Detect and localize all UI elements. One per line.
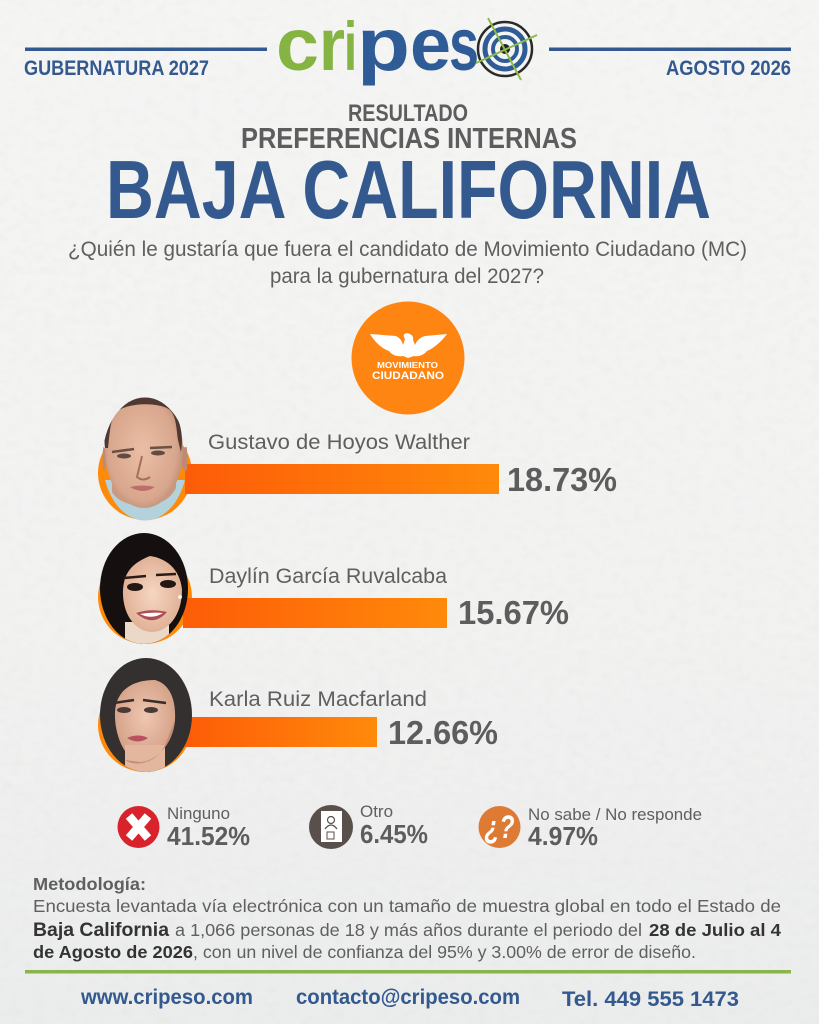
party logo: Movimiento Ciudadano: [352, 302, 464, 414]
value: 18.73%: [507, 461, 617, 498]
logo: cripeso: [276, 3, 537, 86]
footer contact: www.cripeso.com: [80, 985, 253, 1009]
icon: question marks: [478, 806, 520, 848]
name: Daylín García Ruvalcaba: [209, 564, 447, 588]
footer contact: contacto@cripeso.com: [296, 985, 520, 1009]
header: left label: [24, 48, 267, 80]
logo: cripeso: p: [357, 3, 410, 86]
value: 15.67%: [458, 594, 569, 631]
stat: No sabe / No responde: No sabe / No responde: [528, 805, 702, 824]
header: left label: GUBERNATURA 2027: [24, 57, 209, 80]
name: Gustavo de Hoyos Walther: [208, 430, 470, 454]
stat: Otro: Otro: [360, 802, 393, 821]
logo target icon: [476, 18, 537, 80]
eagle emblem: [370, 333, 447, 358]
candidate 2: Daylín García Ruvalcaba: [95, 530, 569, 646]
party logo: Movimiento Ciudadano: MOVIMIENTO: [377, 361, 438, 370]
stat: No sabe / No responde: [478, 805, 702, 851]
methodology text: Metodología:: [33, 874, 146, 894]
logo: cripeso: c: [276, 3, 319, 86]
header: right label: [549, 48, 791, 80]
portrait 3: [100, 658, 192, 772]
stat: Ninguno: [118, 804, 250, 851]
logo: cripeso: r: [319, 3, 345, 86]
icon: red x: [118, 806, 160, 848]
methodology text: Encuesta levantada vía electrónica con un tamaño de muestra global en todo el Estado de: [33, 896, 781, 916]
stat: Otro: [309, 802, 428, 849]
methodology text: de Agosto de 2026: [33, 942, 193, 962]
icon: question marks: ¿?: [484, 809, 514, 845]
logo: cripeso: e: [410, 3, 451, 86]
methodology text: [33, 874, 781, 962]
title block: RESULTADO: [348, 100, 468, 127]
survey question: ¿Quién le gustaría que fuera el candidato de Movimiento Ciudadano (MC): [68, 237, 747, 261]
footer contact: Tel. 449 555 1473: [562, 987, 739, 1011]
candidate 3: Karla Ruiz Macfarland: [95, 655, 498, 775]
methodology text: Baja California: [33, 920, 169, 941]
logo: cripeso: s: [449, 3, 479, 86]
footer contact: [25, 970, 791, 1011]
value: 12.66%: [388, 714, 498, 751]
candidate 1: Gustavo de Hoyos Walther: [95, 390, 617, 525]
title block: [106, 100, 711, 236]
methodology text: 28 de Julio al 4: [649, 920, 781, 940]
stat: Ninguno: 41.52%: [167, 821, 250, 851]
stat: Ninguno: Ninguno: [167, 804, 230, 823]
methodology text: , con un nivel de confianza del 95% y 3.00% de error de diseño.: [193, 942, 696, 962]
name: Karla Ruiz Macfarland: [209, 687, 427, 711]
icon: ballot: [309, 805, 353, 849]
title block: PREFERENCIAS INTERNAS: [241, 123, 577, 155]
header: right label: AGOSTO 2026: [666, 57, 791, 80]
portrait 2: [100, 533, 188, 644]
stat: Otro: 6.45%: [360, 819, 428, 849]
party logo: Movimiento Ciudadano: CIUDADANO: [372, 370, 444, 382]
survey question: [68, 237, 747, 288]
logo: cripeso: i: [344, 8, 357, 85]
survey question: para la gubernatura del 2027?: [270, 264, 544, 288]
methodology text: a 1,066 personas de 18 y más años durante el periodo del: [175, 920, 642, 940]
portrait 1: [102, 398, 188, 520]
stat: No sabe / No responde: 4.97%: [528, 821, 598, 851]
